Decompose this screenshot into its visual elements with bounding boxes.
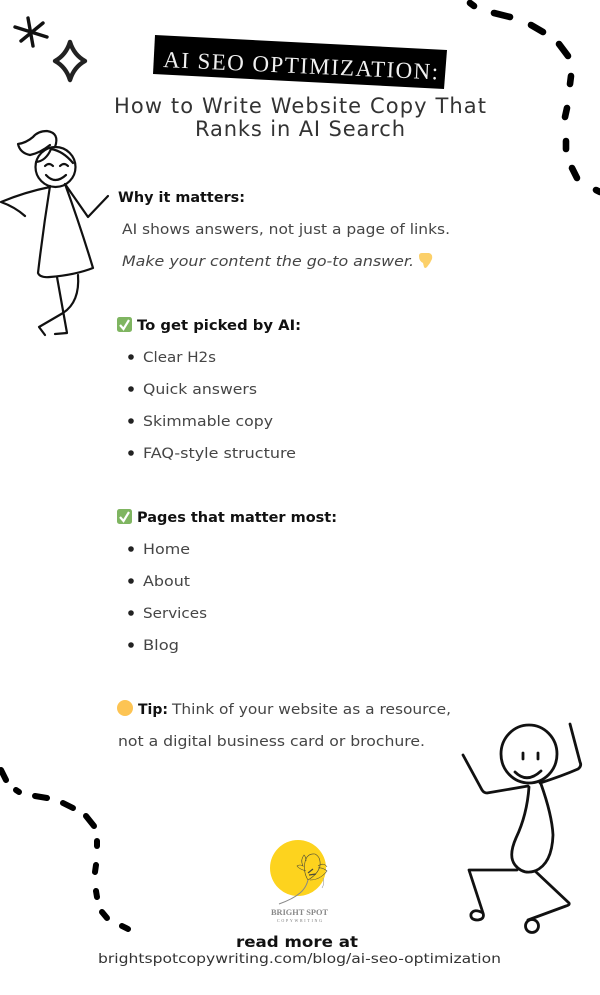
subtitle: How to Write Website Copy That xyxy=(114,94,486,118)
section: why it matters xyxy=(118,190,450,270)
icon: green check xyxy=(117,317,132,332)
bullet list: picked by AI: Quick answers xyxy=(143,382,257,398)
bullet list: picked by AI: FAQ-style structure xyxy=(143,446,296,462)
section: to get picked by AI xyxy=(117,317,301,462)
decorative dashed curve: top right xyxy=(470,3,600,192)
logo: Bright Spot Copywriting: COPYWRITING xyxy=(277,918,322,923)
bullet list: pages: Blog xyxy=(143,638,179,654)
title banner: AI SEO OPTIMIZATION: xyxy=(163,47,439,84)
logo: Bright Spot Copywriting: BRIGHT SPOT xyxy=(271,908,329,917)
section: why it matters: Why it matters: xyxy=(118,190,245,206)
tip callout xyxy=(117,700,451,750)
tip callout: Tip: xyxy=(138,702,168,718)
bullet list: pages: Services xyxy=(143,606,207,622)
icon: green check xyxy=(117,509,132,524)
bullet list: picked by AI: Skimmable copy xyxy=(143,414,273,430)
tip callout: not a digital business card or brochure. xyxy=(118,734,425,750)
bullet list: picked by AI xyxy=(128,350,296,462)
section: pages that matter most xyxy=(117,509,337,654)
illustration: dancing stick figure xyxy=(463,724,581,932)
decorative dashed curve: bottom left xyxy=(1,770,128,929)
bullet list: pages xyxy=(128,542,207,654)
illustration: stick girl with ponytail xyxy=(1,131,108,335)
footer: read more link: brightspotcopywriting.com/blog/ai-seo-optimization xyxy=(98,951,501,967)
footer: read more link xyxy=(98,933,501,967)
icon: pointing down hand xyxy=(419,253,432,268)
logo: Bright Spot Copywriting xyxy=(270,840,329,923)
bullet list: pages: Home xyxy=(143,542,190,558)
subtitle: Ranks in AI Search xyxy=(195,117,405,141)
footer: read more link: read more at xyxy=(236,933,358,951)
icon: flower line drawing xyxy=(279,854,327,904)
title banner xyxy=(153,35,447,89)
icon: asterisk doodle xyxy=(15,18,47,46)
section: pages that matter most: Pages that matter most: xyxy=(137,510,337,526)
section: why it matters: Make your content the go-to answer. xyxy=(122,254,414,270)
icon: yellow dot xyxy=(117,700,133,716)
bullet list: pages: About xyxy=(143,574,190,590)
section: why it matters: AI shows answers, not just a page of links. xyxy=(122,222,450,238)
section: to get picked by AI: To get picked by AI: xyxy=(137,318,301,334)
bullet list: picked by AI: Clear H2s xyxy=(143,350,216,366)
icon: four-point star doodle xyxy=(55,42,85,80)
subtitle xyxy=(114,94,486,141)
tip callout: Think of your website as a resource, xyxy=(171,702,451,718)
